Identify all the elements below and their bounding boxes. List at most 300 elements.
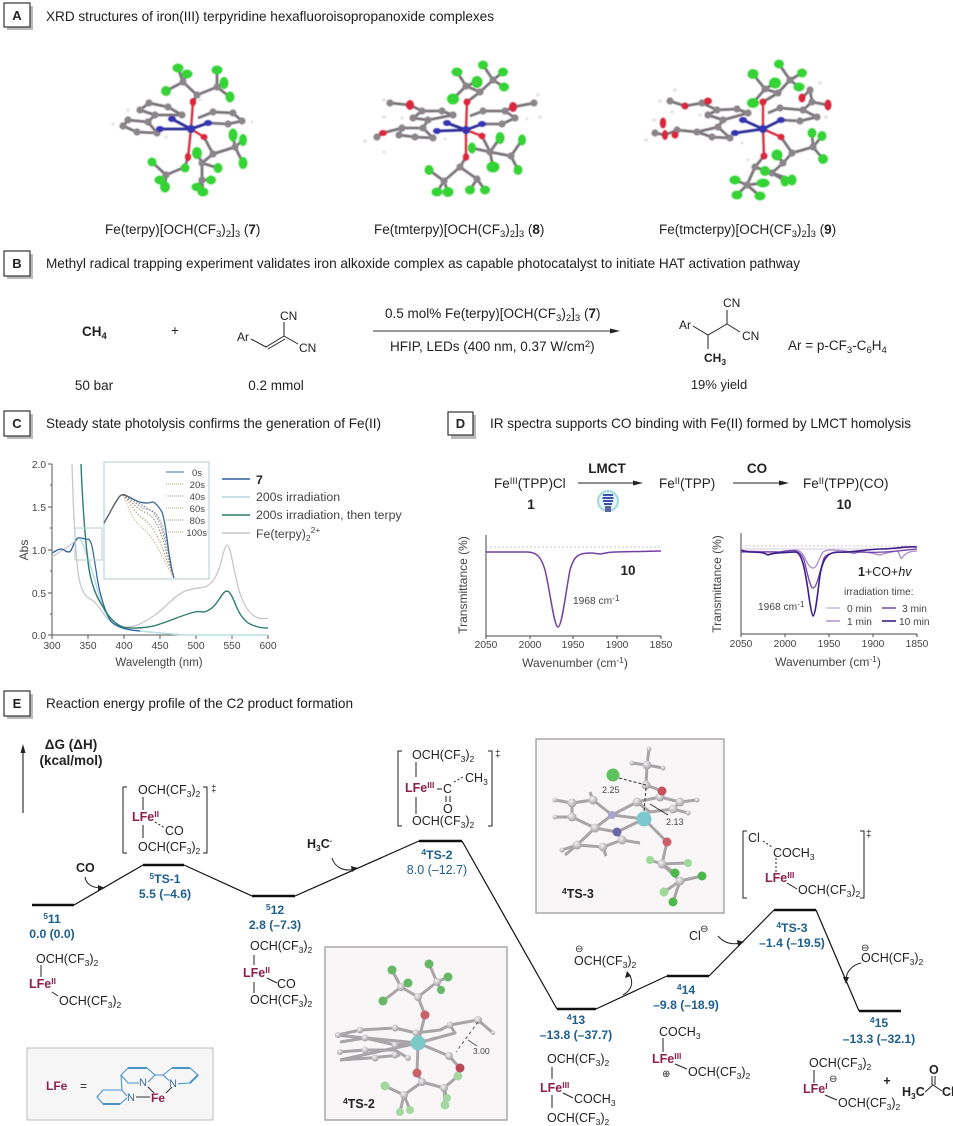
structure 4-15 plus acetyl chloride: OCH(CF bbox=[809, 1056, 858, 1070]
inset bbox=[104, 462, 209, 579]
conditions above arrow: 2 bbox=[566, 313, 571, 324]
energy values: 4 bbox=[567, 1012, 572, 1022]
IR time series: 1+CO+hv bbox=[858, 565, 912, 579]
IR spectrum of 10: ) bbox=[624, 656, 628, 670]
CO addition arrow: CO bbox=[76, 861, 95, 875]
energy values: –9.8 (–18.9) bbox=[653, 998, 719, 1012]
structure 4-15 plus acetyl chloride: H bbox=[902, 1085, 911, 1099]
structure 5-11: 2 bbox=[94, 958, 99, 968]
chart legend: 2 bbox=[306, 533, 311, 543]
IR spectrum of 10: 1950 bbox=[562, 640, 585, 651]
panel B: methyl radical trapping bbox=[4, 251, 887, 393]
substrate: CN bbox=[280, 309, 297, 323]
absorbance chart: 550 bbox=[224, 641, 241, 652]
structure 4TS-3: 2 bbox=[856, 889, 861, 899]
structure 4-15 plus acetyl chloride: + bbox=[883, 1074, 891, 1088]
structure 4-15 plus acetyl chloride: ) bbox=[862, 1056, 867, 1070]
inset: 60s bbox=[190, 504, 205, 515]
structure 4-14: 3 bbox=[737, 1071, 742, 1081]
IR time series: 2000 bbox=[774, 639, 797, 650]
alkoxide leaving arrow: 3 bbox=[623, 960, 628, 970]
energy values: 12 bbox=[271, 903, 284, 917]
product: 3 bbox=[721, 357, 726, 367]
IR spectrum of 10 bbox=[456, 535, 673, 670]
conditions above arrow: ] bbox=[571, 306, 575, 321]
structure 4-13: OCH(CF bbox=[547, 1111, 596, 1125]
heading B: Methyl radical trapping experiment validates iron alkoxide complex as capable photocatalyst to initiate HAT activation pathway bbox=[46, 256, 800, 271]
heading E: Reaction energy profile of the C2 product formation bbox=[46, 696, 353, 711]
IR time series: -1 bbox=[869, 654, 877, 664]
structure 4-14: III bbox=[674, 1051, 681, 1061]
structure 4TS-2: OCH(CF bbox=[412, 748, 461, 762]
energy values: 0.0 (0.0) bbox=[29, 927, 75, 941]
IR time series: ) bbox=[877, 655, 881, 669]
absorbance chart: 600 bbox=[260, 641, 277, 652]
3D model box 4TS-2: TS-2 bbox=[348, 1097, 375, 1111]
IR time series: 10 min bbox=[899, 617, 930, 628]
IR time series: 3 min bbox=[902, 604, 927, 615]
structure 5-11: LFe bbox=[29, 977, 51, 991]
structure 4TS-3 bbox=[743, 829, 872, 899]
label molecule 9: ] bbox=[807, 222, 811, 237]
energy values: 8.0 (–12.7) bbox=[407, 863, 467, 877]
structure 4TS-2: 3 bbox=[483, 777, 488, 787]
structure 4-14: 3 bbox=[696, 1031, 701, 1041]
conditions above arrow: ) bbox=[561, 306, 566, 321]
structure 4TS-2: ) bbox=[465, 814, 470, 828]
label molecule 9: 3 bbox=[811, 229, 816, 240]
label molecule 9: ( bbox=[816, 222, 825, 237]
LMCT scheme: Fe bbox=[803, 476, 819, 491]
structure 4-13: LFe bbox=[540, 1081, 562, 1095]
energy values: 4 bbox=[421, 847, 426, 857]
energy values: 4 bbox=[677, 982, 682, 992]
substrate: Ar bbox=[237, 330, 249, 344]
heading A: XRD structures of iron(III) terpyridine hexafluoroisopropanoxide complexes bbox=[46, 9, 494, 24]
structure 4-14: OCH(CF bbox=[688, 1065, 737, 1079]
alkoxide entering arrow: ⊖ bbox=[861, 943, 869, 954]
0.2 mmol: 0.2 mmol bbox=[248, 378, 304, 393]
structure 4TS-3: LFe bbox=[765, 871, 787, 885]
structure 4-13: OCH(CF bbox=[547, 1052, 596, 1066]
structure 5-12: OCH(CF bbox=[250, 939, 299, 953]
label molecule 8: Fe(tmterpy)[OCH(CF bbox=[374, 222, 500, 237]
alkoxide entering arrow: ) bbox=[914, 951, 919, 965]
3D model box 4TS-3: 4 bbox=[562, 886, 567, 896]
absorbance chart: 350 bbox=[80, 641, 97, 652]
energy values: –13.8 (–37.7) bbox=[540, 1028, 612, 1042]
IR time series: Transmittance (%) bbox=[710, 535, 724, 633]
energy axis label: (kcal/mol) bbox=[39, 753, 103, 768]
structure 5TS-1: 3 bbox=[187, 846, 192, 856]
structure 4-15 plus acetyl chloride: 3 bbox=[911, 1091, 916, 1101]
structure 4TS-2: 2 bbox=[470, 820, 475, 830]
structure 4-13: 2 bbox=[605, 1058, 610, 1068]
IR spectrum of 10: Wavenumber (cm bbox=[522, 656, 616, 670]
structure 5-11: ) bbox=[89, 952, 94, 966]
methyl radical arrow: C bbox=[321, 837, 330, 851]
alkoxide entering arrow bbox=[843, 943, 924, 984]
methyl radical arrow: · bbox=[330, 836, 333, 846]
structure 4-15 plus acetyl chloride: 3 bbox=[887, 1102, 892, 1112]
panel A: XRD structures bbox=[4, 3, 836, 240]
Ar definition: -C bbox=[852, 338, 867, 353]
IR time series: irradiation time: bbox=[844, 587, 914, 598]
structure 5-12: 3 bbox=[299, 999, 304, 1009]
IR time series: -1 bbox=[797, 599, 805, 609]
badge D: D bbox=[456, 416, 465, 431]
structure 4-15 plus acetyl chloride: I bbox=[825, 1081, 828, 1091]
structure 5TS-1: 2 bbox=[196, 846, 201, 856]
label molecule 7: ] bbox=[231, 222, 235, 237]
chart legend: Fe(terpy) bbox=[256, 527, 306, 541]
LMCT scheme: III bbox=[510, 476, 518, 487]
chart legend bbox=[222, 473, 402, 543]
LMCT scheme: 10 bbox=[836, 497, 852, 512]
label molecule 8: ) bbox=[505, 222, 510, 237]
molecule 7 bbox=[111, 64, 254, 196]
conditions below arrow: HFIP, LEDs (400 nm, 0.37 W/cm bbox=[390, 339, 585, 354]
structure 5TS-1: II bbox=[154, 809, 159, 819]
chart legend: 200s irradiation bbox=[256, 490, 340, 504]
absorbance chart: 2.0 bbox=[32, 460, 46, 471]
terpy ligand structure: N bbox=[139, 1077, 147, 1089]
structure 4-13: ) bbox=[600, 1052, 605, 1066]
heading D: IR spectra supports CO binding with Fe(II) formed by LMCT homolysis bbox=[490, 416, 911, 431]
LFe legend box: = bbox=[80, 1079, 87, 1093]
Ar definition: H bbox=[872, 338, 881, 353]
badge C bbox=[4, 411, 33, 439]
energy values: 14 bbox=[682, 983, 695, 997]
structure 4-13: COCH bbox=[574, 1092, 611, 1106]
structure 4TS-2: III bbox=[427, 780, 434, 790]
structure 5-12: 2 bbox=[308, 999, 313, 1009]
structure 5-11: OCH(CF bbox=[59, 994, 108, 1008]
energy values: 13 bbox=[572, 1013, 585, 1027]
3D model box 4TS-3: 2.25 bbox=[602, 785, 620, 795]
IR time series: 2050 bbox=[730, 639, 753, 650]
absorbance chart bbox=[17, 460, 277, 669]
absorbance chart: Abs bbox=[17, 540, 31, 560]
structure 5-11: II bbox=[51, 976, 56, 986]
structure 4-13: 3 bbox=[596, 1058, 601, 1068]
CO addition arrow bbox=[76, 861, 105, 891]
structure 4TS-3: Cl bbox=[748, 831, 760, 845]
structure 4TS-2: O bbox=[443, 802, 453, 816]
structure 4-13 bbox=[540, 1052, 616, 1126]
structure 4TS-2: ‡ bbox=[495, 749, 501, 760]
structure 4TS-3: COCH bbox=[773, 846, 810, 860]
chart legend: 7 bbox=[256, 473, 263, 487]
terpy ligand structure: N bbox=[127, 1092, 135, 1104]
IR spectrum of 10: 1850 bbox=[650, 640, 673, 651]
structure 4-15 plus acetyl chloride: ⊖ bbox=[829, 1074, 837, 1085]
structure 4-13: ) bbox=[600, 1111, 605, 1125]
IR time series: 1900 bbox=[862, 639, 885, 650]
structure 4TS-2: C bbox=[443, 782, 452, 796]
energy values: 5.5 (–4.6) bbox=[139, 887, 191, 901]
badge A bbox=[4, 3, 33, 30]
structure 5-12: ) bbox=[303, 993, 308, 1007]
absorbance chart: 300 bbox=[44, 641, 61, 652]
badge B bbox=[4, 251, 33, 279]
structure 5-11 bbox=[29, 952, 122, 1010]
product bbox=[679, 296, 759, 367]
chart legend: 200s irradiation, then terpy bbox=[256, 508, 402, 522]
structure 5-12: II bbox=[265, 965, 270, 975]
structure 5TS-1: ) bbox=[191, 840, 196, 854]
structure 4-14 bbox=[652, 1025, 751, 1081]
absorbance chart: 0.5 bbox=[32, 589, 46, 600]
IR time series: 1968 cm bbox=[758, 602, 797, 613]
energy values: 2.8 (–7.3) bbox=[249, 918, 301, 932]
label molecule 7: 2 bbox=[226, 229, 231, 240]
IR spectrum of 10: Transmittance (%) bbox=[456, 536, 470, 634]
LMCT scheme: (TPP)Cl bbox=[518, 476, 566, 491]
structure 4TS-2: 3 bbox=[461, 820, 466, 830]
IR time series bbox=[710, 533, 930, 669]
label molecule 8: ] bbox=[515, 222, 519, 237]
alkoxide leaving arrow: OCH(CF bbox=[574, 954, 623, 968]
alkoxide leaving arrow: ⊖ bbox=[575, 944, 583, 955]
structure 4TS-3: III bbox=[787, 870, 794, 880]
panel D: IR spectra bbox=[448, 412, 930, 670]
label molecule 7: ( bbox=[240, 222, 249, 237]
structure 5-12: CO bbox=[277, 977, 296, 991]
absorbance chart: 450 bbox=[152, 641, 169, 652]
structure 4-13: 3 bbox=[611, 1098, 616, 1108]
absorbance chart: 400 bbox=[116, 641, 133, 652]
structure 4TS-3: ‡ bbox=[866, 829, 872, 840]
absorbance chart: 0.0 bbox=[32, 631, 46, 642]
structure 4-15 plus acetyl chloride: O bbox=[929, 1063, 939, 1077]
LMCT scheme: (TPP)(CO) bbox=[824, 476, 889, 491]
energy values: 5 bbox=[43, 911, 48, 921]
energy values bbox=[29, 847, 915, 1046]
LMCT scheme: II bbox=[675, 476, 680, 487]
label molecule 9: 2 bbox=[802, 229, 807, 240]
label molecule 7: Fe(terpy)[OCH(CF bbox=[105, 222, 216, 237]
energy values: TS-1 bbox=[154, 872, 181, 886]
product: CN bbox=[742, 329, 759, 343]
structure 4TS-2: 2 bbox=[470, 754, 475, 764]
label molecule 8: 3 bbox=[500, 229, 505, 240]
LMCT scheme: LMCT bbox=[588, 461, 626, 476]
structure 4TS-2: OCH(CF bbox=[412, 814, 461, 828]
substrate: CN bbox=[299, 341, 316, 355]
badge C: C bbox=[12, 416, 22, 431]
conditions above arrow: 3 bbox=[556, 313, 561, 324]
label molecule 8: 8) bbox=[532, 222, 544, 237]
structure 5-11: 2 bbox=[117, 1000, 122, 1010]
yield: 19% yield bbox=[691, 377, 747, 392]
panel C: steady state photolysis bbox=[4, 411, 402, 669]
structure 5-12: 2 bbox=[308, 945, 313, 955]
LMCT scheme: 1 bbox=[527, 497, 535, 512]
structure 4TS-2: LFe bbox=[405, 781, 427, 795]
IR time series: 0 min bbox=[847, 604, 872, 615]
LMCT scheme: II bbox=[819, 476, 824, 487]
3D model box 4TS-2 bbox=[325, 947, 507, 1120]
label molecule 7: ) bbox=[221, 222, 226, 237]
absorbance chart: 500 bbox=[188, 641, 205, 652]
absorbance chart: 1.5 bbox=[32, 503, 46, 514]
badge B: B bbox=[12, 256, 22, 271]
structure 4TS-2: ) bbox=[465, 748, 470, 762]
structure 4-14: 2 bbox=[746, 1071, 751, 1081]
alkoxide leaving arrow bbox=[574, 944, 637, 995]
LMCT scheme bbox=[494, 461, 889, 512]
structure 4-15 plus acetyl chloride: 2 bbox=[867, 1062, 872, 1072]
inset: 80s bbox=[190, 516, 205, 527]
terpy ligand structure: Fe bbox=[151, 1091, 165, 1105]
product: CN bbox=[723, 296, 740, 310]
alkoxide leaving arrow: ) bbox=[627, 954, 632, 968]
IR spectrum of 10: 1900 bbox=[606, 640, 629, 651]
IR spectrum of 10: -1 bbox=[616, 655, 624, 665]
structure 4-15 plus acetyl chloride: ) bbox=[891, 1096, 896, 1110]
energy values: 11 bbox=[48, 912, 61, 926]
LMCT scheme: (TPP) bbox=[680, 476, 715, 491]
methyl radical arrow: H bbox=[307, 837, 316, 851]
energy profile line bbox=[32, 841, 901, 1011]
structure 5-12: LFe bbox=[243, 966, 265, 980]
Ar definition: 4 bbox=[881, 345, 887, 356]
energy values: TS-2 bbox=[426, 848, 453, 862]
chloride arrow bbox=[689, 924, 744, 946]
label molecule 8: 2 bbox=[510, 229, 515, 240]
molecule 9 bbox=[644, 60, 832, 200]
terpy ligand structure bbox=[97, 1068, 198, 1105]
3D model box 4TS-2: 3.00 bbox=[473, 1046, 490, 1056]
IR time series: Wavenumber (cm bbox=[775, 655, 869, 669]
label molecule 9: Fe(tmcterpy)[OCH(CF bbox=[659, 222, 792, 237]
structure 5-12: 3 bbox=[299, 945, 304, 955]
structure 5TS-1: LFe bbox=[132, 810, 154, 824]
structure 4-15 plus acetyl chloride: OCH(CF bbox=[838, 1096, 887, 1110]
label molecule 8: 3 bbox=[519, 229, 524, 240]
badge D bbox=[448, 412, 476, 439]
methyl radical arrow: 3 bbox=[316, 843, 321, 853]
structure 5-12: ) bbox=[303, 939, 308, 953]
reaction arrow bbox=[373, 328, 620, 334]
conditions below arrow: ) bbox=[590, 339, 595, 354]
energy values: TS-3 bbox=[781, 921, 808, 935]
label molecule 9: 3 bbox=[792, 229, 797, 240]
badge E: E bbox=[13, 696, 22, 711]
IR time series: 1950 bbox=[818, 639, 841, 650]
energy values: 5 bbox=[266, 902, 271, 912]
structure 5TS-1: 2 bbox=[196, 789, 201, 799]
product: CH bbox=[704, 351, 721, 365]
LMCT scheme: Fe bbox=[494, 476, 510, 491]
chart legend: 2+ bbox=[311, 525, 320, 535]
structure 5TS-1: OCH(CF bbox=[138, 783, 187, 797]
structure 4-14: ⊕ bbox=[662, 1069, 670, 1080]
IR time series: 1850 bbox=[906, 639, 929, 650]
structure 4-13: III bbox=[562, 1080, 569, 1090]
structure 5TS-1: 3 bbox=[187, 789, 192, 799]
inset: 20s bbox=[190, 480, 205, 491]
structure 5-11: OCH(CF bbox=[36, 952, 85, 966]
structure 5-11: ) bbox=[112, 994, 117, 1008]
structure 5TS-1: ‡ bbox=[211, 784, 217, 795]
heading C: Steady state photolysis confirms the generation of Fe(II) bbox=[46, 416, 381, 431]
energy values: 4 bbox=[870, 1015, 875, 1025]
structure 4-15 plus acetyl chloride: 2 bbox=[896, 1102, 901, 1112]
chloride arrow: ⊖ bbox=[700, 924, 708, 935]
LMCT scheme: Fe bbox=[659, 476, 675, 491]
Ar definition: Ar = p-CF bbox=[788, 338, 847, 353]
50 bar: 50 bar bbox=[75, 378, 114, 393]
conditions below arrow: 2 bbox=[585, 339, 590, 350]
structure 5-12 bbox=[243, 939, 313, 1009]
IR time series: 1 min bbox=[847, 617, 872, 628]
energy values: 5 bbox=[149, 871, 154, 881]
3D model box 4TS-3: TS-3 bbox=[567, 887, 594, 901]
structure 5-12: OCH(CF bbox=[250, 993, 299, 1007]
chloride arrow: Cl bbox=[689, 929, 701, 943]
label molecule 7: 3 bbox=[235, 229, 240, 240]
methane: CH bbox=[82, 324, 102, 339]
badge A: A bbox=[12, 8, 22, 23]
product: Ar bbox=[679, 318, 691, 332]
structure 4TS-2 bbox=[398, 748, 501, 830]
label molecule 9: ) bbox=[797, 222, 802, 237]
structure 4TS-3: 3 bbox=[810, 852, 815, 862]
structure 4-14: ) bbox=[741, 1065, 746, 1079]
structure 4-15 plus acetyl chloride: C bbox=[916, 1085, 925, 1099]
panel E: reaction energy profile bbox=[4, 691, 953, 1126]
structure 4TS-3: 3 bbox=[847, 889, 852, 899]
structure 5TS-1: CO bbox=[165, 824, 184, 838]
alkoxide entering arrow: 3 bbox=[910, 957, 915, 967]
badge E bbox=[4, 691, 33, 719]
alkoxide entering arrow: 2 bbox=[919, 957, 924, 967]
plus: + bbox=[171, 323, 179, 338]
conditions above arrow: 3 bbox=[575, 313, 580, 324]
structure 5-11: 3 bbox=[108, 1000, 113, 1010]
structure 5TS-1: OCH(CF bbox=[138, 840, 187, 854]
energy values: –1.4 (–19.5) bbox=[759, 936, 825, 950]
alkoxide leaving arrow: 2 bbox=[632, 960, 637, 970]
3D model box 4TS-3: 2.13 bbox=[666, 817, 684, 827]
inset: 0s bbox=[192, 468, 202, 479]
IR spectrum of 10: -1 bbox=[612, 593, 620, 603]
methane: 4 bbox=[102, 331, 108, 342]
inset: 40s bbox=[190, 492, 205, 503]
absorbance chart: Wavelength (nm) bbox=[115, 657, 203, 669]
structure 4-15 plus acetyl chloride: 3 bbox=[858, 1062, 863, 1072]
energy values: 4 bbox=[776, 920, 781, 930]
Ar definition: 3 bbox=[847, 345, 852, 356]
3D model box 4TS-3 bbox=[536, 739, 724, 913]
energy axis arrow bbox=[20, 744, 26, 813]
molecule 8 bbox=[363, 60, 542, 197]
structure 5TS-1 bbox=[123, 783, 217, 856]
inset: 100s bbox=[186, 528, 207, 539]
energy axis label bbox=[39, 737, 103, 768]
structure 4TS-2: 3 bbox=[461, 754, 466, 764]
label molecule 9: 9) bbox=[824, 222, 836, 237]
terpy ligand structure: N bbox=[169, 1078, 177, 1090]
conditions above arrow: 0.5 mol% Fe(terpy)[OCH(CF bbox=[385, 306, 556, 321]
energy axis label: ΔG (ΔH) bbox=[45, 737, 97, 752]
structure 4-14: COCH bbox=[659, 1025, 696, 1039]
IR spectrum of 10: 1968 cm bbox=[573, 596, 612, 607]
methyl radical arrow bbox=[307, 836, 358, 872]
LMCT scheme: CO bbox=[747, 461, 767, 476]
